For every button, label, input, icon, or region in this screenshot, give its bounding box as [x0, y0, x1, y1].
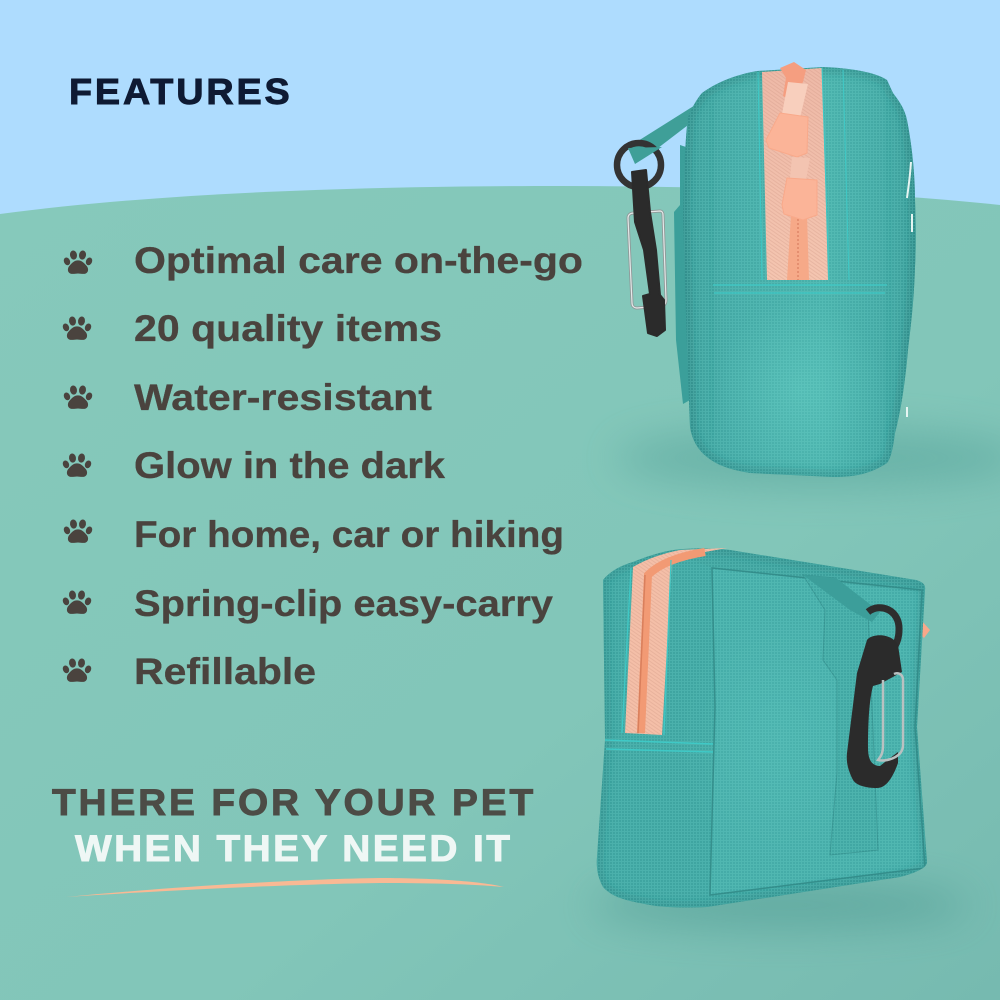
top band	[846, 583, 918, 591]
shadow: top bag	[615, 428, 1000, 488]
feature: glow in the dark: Glow in the dark	[134, 445, 445, 486]
zipper teeth	[641, 552, 705, 733]
white print hint	[907, 162, 912, 417]
zipper stitching	[622, 560, 671, 735]
zipper slider	[780, 62, 806, 100]
pocket seams	[713, 285, 887, 293]
zipper tape	[625, 548, 727, 735]
zipper pull 2	[782, 178, 817, 220]
feature: refillable: Refillable	[134, 651, 316, 692]
bag pull peeking out	[918, 620, 930, 638]
carabiner ring	[868, 608, 899, 652]
zipper pull 1	[766, 113, 808, 157]
product: bag side view	[617, 62, 916, 480]
bag body	[597, 548, 927, 908]
decorative swoosh underline	[66, 878, 504, 897]
zipper tape	[762, 68, 828, 280]
rear strap	[674, 145, 690, 404]
product: bag back view	[597, 548, 930, 908]
loop over ring	[628, 147, 662, 164]
bag fabric and edge shading	[597, 548, 927, 908]
feature: water resistant: Water-resistant	[134, 377, 432, 418]
feature: spring clip: Spring-clip easy-carry	[134, 583, 553, 624]
zipper strap 2	[790, 157, 810, 180]
carabiner body	[632, 170, 665, 336]
feature: home car hiking: For home, car or hiking	[134, 514, 564, 555]
zipper strap 1	[782, 82, 808, 118]
carabiner wire gate	[628, 211, 666, 308]
face seam	[710, 568, 925, 895]
front face	[710, 568, 925, 895]
shadow: bottom bag	[590, 881, 970, 929]
carabiner wire gate	[878, 673, 903, 760]
tagline: there for your pet: THERE FOR YOUR PET	[52, 783, 536, 824]
pocket seams	[605, 740, 713, 752]
strap loop	[803, 575, 880, 622]
feature: quality items: 20 quality items	[134, 308, 442, 349]
feature list	[62, 240, 583, 692]
feature: optimal care: Optimal care on-the-go	[134, 240, 583, 281]
heading: features: FEATURES	[69, 72, 293, 112]
carabiner body	[847, 635, 902, 788]
bag fabric and edge shading	[683, 67, 916, 480]
feature: refillable	[62, 651, 316, 692]
strap tab	[803, 575, 878, 855]
zipper teeth	[787, 215, 809, 280]
carabiner ring	[617, 143, 661, 187]
zipper stitching	[758, 68, 849, 280]
hanging loop	[630, 102, 700, 163]
tagline: when they need it: WHEN THEY NEED IT	[75, 829, 512, 870]
bag body	[683, 67, 916, 477]
